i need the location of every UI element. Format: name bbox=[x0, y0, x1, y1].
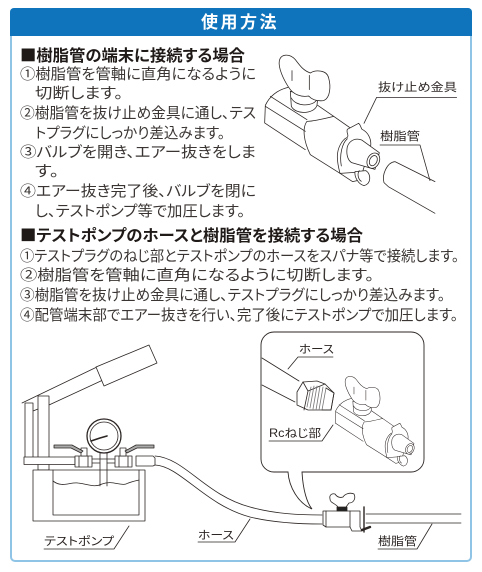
left ball valve bbox=[75, 456, 92, 467]
label: resin pipe: 樹脂管 bbox=[380, 129, 420, 143]
text block: pump hose steps: ②樹脂管を管軸に直角になるように切断します。 bbox=[20, 266, 374, 284]
leader: Rc thread bbox=[269, 425, 333, 441]
leader: resin pipe bbox=[380, 145, 430, 181]
text block: resin pipe end steps: ②樹脂管を抜け止め金具に通し、テス bbox=[20, 104, 256, 122]
text block: resin pipe end steps bbox=[20, 65, 256, 220]
illustration: test pump bbox=[22, 345, 157, 521]
text block: pump hose steps bbox=[20, 247, 459, 324]
title: 使用方法 bbox=[201, 12, 279, 32]
leader: test pump bbox=[44, 526, 129, 549]
illustration: valve in detail bbox=[335, 376, 416, 466]
water tank bbox=[33, 470, 145, 521]
label: retaining fitting: 抜け止め金具 bbox=[378, 80, 457, 94]
riser into tank bbox=[100, 453, 107, 486]
header bar bbox=[10, 8, 472, 36]
text block: resin pipe end steps: ③バルブを開き、エアー抜きをしま bbox=[20, 143, 256, 161]
text block: resin pipe end steps: 切断します。 bbox=[35, 85, 123, 102]
hose coupling bbox=[136, 456, 155, 466]
text block: resin pipe end steps: トプラグにしっかり差込みます。 bbox=[35, 125, 225, 142]
pressure gauge bbox=[87, 419, 121, 453]
label: resin pipe bottom: 樹脂管 bbox=[378, 534, 417, 548]
heading: connecting at resin pipe end: ■樹脂管の端末に接続する場合 bbox=[20, 42, 245, 66]
leader: retaining fitting bbox=[364, 97, 457, 123]
text block: resin pipe end steps: し、テストポンプ等で加圧します。 bbox=[35, 202, 245, 220]
text block: pump hose steps: ③樹脂管を抜け止め金具に通し、テストプラグにしっかり差込みます。 bbox=[20, 286, 445, 304]
right ball valve bbox=[115, 456, 132, 467]
label: test pump: テストポンプ bbox=[44, 535, 115, 548]
text block: resin pipe end steps: ④エアー抜き完了後、バルブを閉に bbox=[20, 182, 256, 200]
leader: resin pipe bottom bbox=[378, 524, 432, 549]
label: hose: ホース bbox=[198, 529, 234, 542]
illustration: hose end with thread bbox=[262, 358, 334, 410]
horizontal pipe bbox=[24, 457, 75, 464]
illustration: assembled valve on pipe bbox=[323, 493, 461, 532]
hose bbox=[155, 456, 322, 524]
illustration: valve with retaining fitting and resin pipe bbox=[265, 55, 457, 213]
text block: resin pipe end steps: ①樹脂管を管軸に直角になるように bbox=[20, 65, 256, 83]
text block: resin pipe end steps: す。 bbox=[35, 163, 59, 180]
text block: pump hose steps: ④配管端末部でエアー抜きを行い、完了後にテストポンプで加圧します。 bbox=[20, 306, 458, 324]
leader: hose bbox=[198, 519, 250, 542]
resin pipe bbox=[383, 162, 435, 213]
pump uprights bbox=[25, 403, 33, 463]
leader: hose in detail bbox=[288, 357, 333, 369]
label: hose in detail: ホース bbox=[299, 343, 334, 356]
heading: connecting pump hose and resin pipe: ■テストポンプのホースと樹脂管を接続する場合 bbox=[20, 223, 363, 246]
callout: detail bubble bbox=[261, 332, 424, 509]
text block: pump hose steps: ①テストプラグのねじ部とテストポンプのホースをスパナ等で接続します。 bbox=[20, 247, 459, 265]
label: Rc thread: Rcねじ部 bbox=[269, 427, 322, 440]
pump handle bbox=[22, 366, 103, 411]
